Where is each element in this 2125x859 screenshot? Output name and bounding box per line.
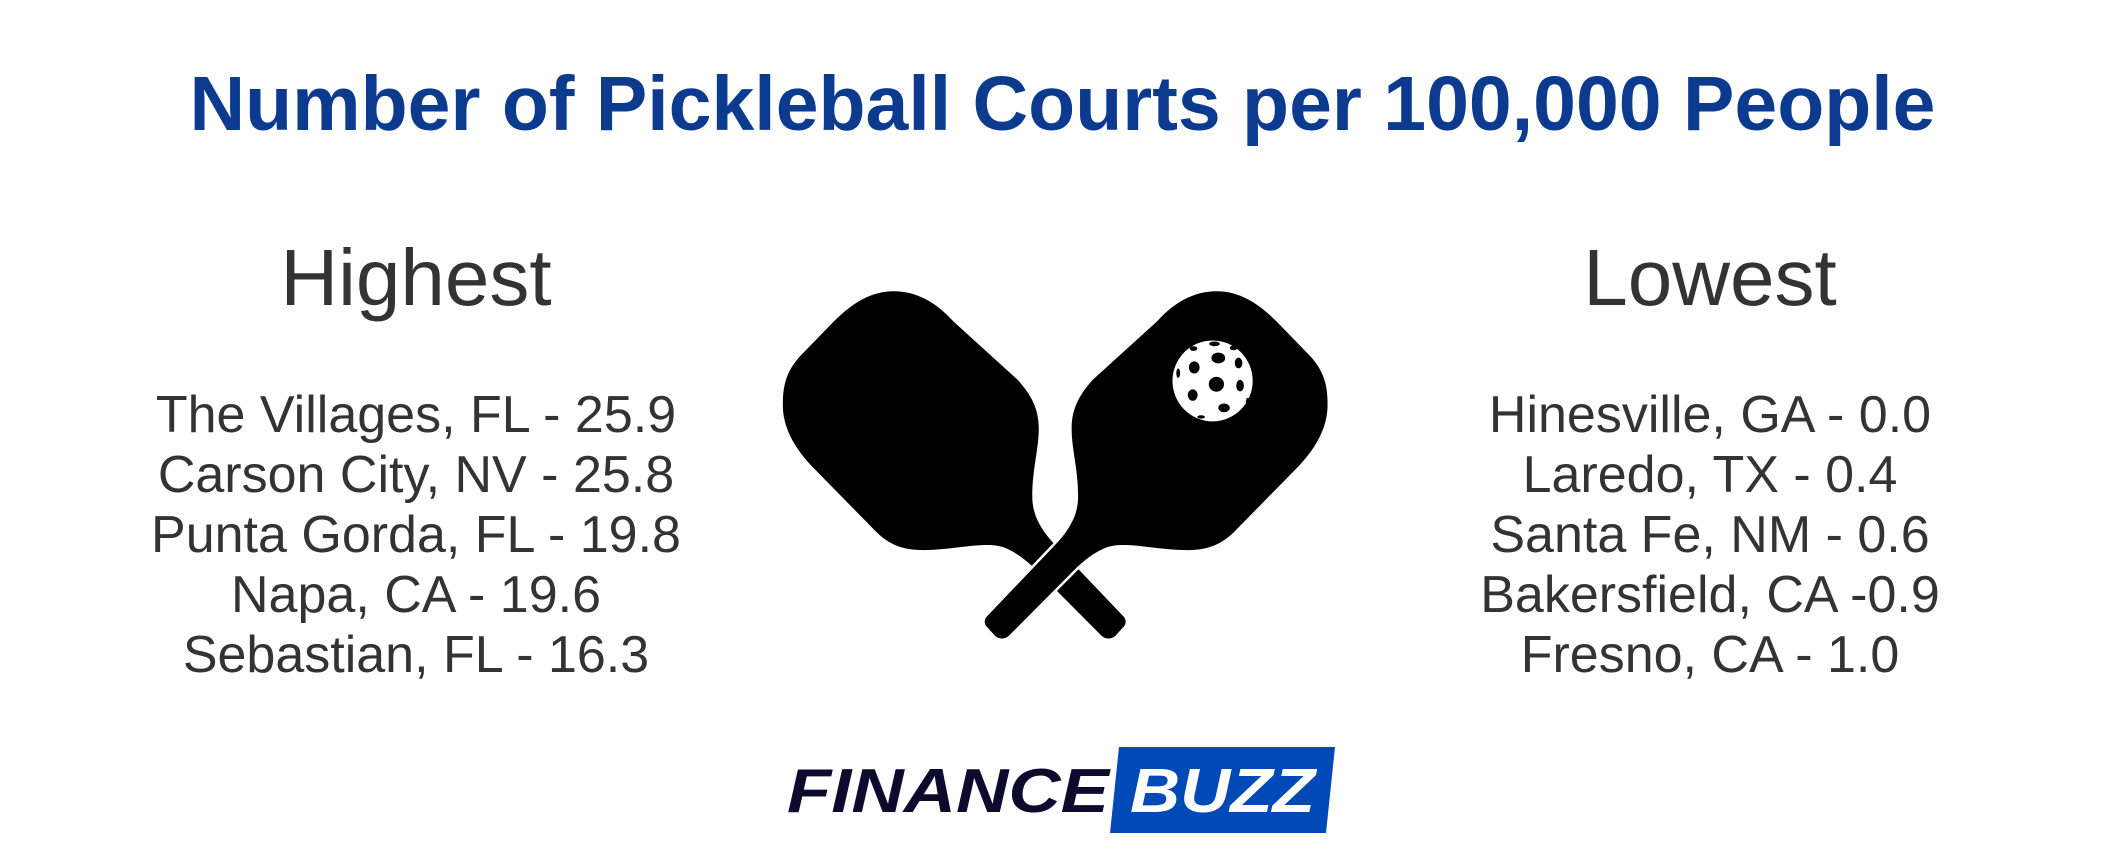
list: lowest: Laredo, TX - 0.4 xyxy=(1523,446,1897,504)
list: highest xyxy=(151,386,681,684)
list: highest: Sebastian, FL - 16.3 xyxy=(183,626,649,684)
list: highest: Napa, CA - 19.6 xyxy=(231,566,601,624)
list: lowest xyxy=(1480,386,1940,684)
list: lowest: Fresno, CA - 1.0 xyxy=(1521,626,1899,684)
logo: FinanceBuzz: BUZZ xyxy=(1130,757,1317,826)
list: lowest: Santa Fe, NM - 0.6 xyxy=(1490,506,1930,564)
list: lowest: Bakersfield, CA -0.9 xyxy=(1480,566,1940,624)
list: highest: The Villages, FL - 25.9 xyxy=(156,386,676,444)
heading: lowest: Lowest xyxy=(1583,233,1837,322)
list: lowest: Hinesville, GA - 0.0 xyxy=(1489,386,1931,444)
list: highest: Carson City, NV - 25.8 xyxy=(158,446,674,504)
title: Number of Pickleball Courts per 100,000 People xyxy=(190,61,1935,147)
icon: ball xyxy=(1172,340,1253,421)
heading: highest: Highest xyxy=(280,233,552,322)
logo: FinanceBuzz xyxy=(787,747,1335,833)
logo: FinanceBuzz: FINANCE xyxy=(787,757,1111,826)
list: highest: Punta Gorda, FL - 19.8 xyxy=(151,506,681,564)
